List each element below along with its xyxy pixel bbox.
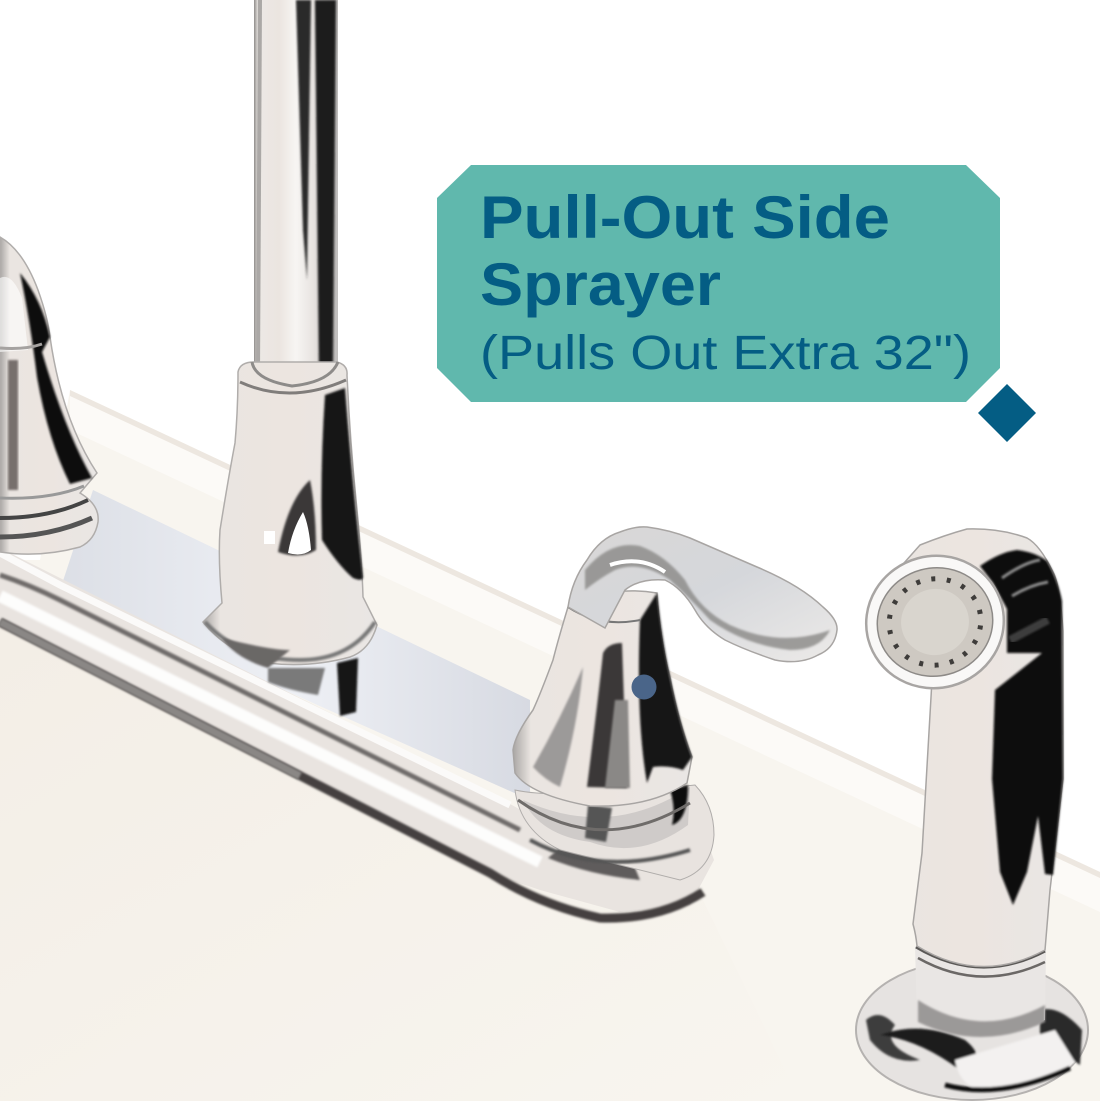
handle cone	[513, 591, 692, 806]
chrome mounting plate	[0, 490, 714, 918]
handle lever	[568, 527, 837, 662]
callout subtext: (Pulls Out Extra 32")	[480, 327, 971, 380]
icon: diamond marker	[978, 384, 1036, 442]
callout panel	[437, 165, 1000, 402]
callout heading second line: Sprayer	[480, 251, 721, 318]
sprayer dark reflection	[980, 550, 1063, 905]
center faucet spout	[203, 0, 377, 716]
icon: handle indicator button	[632, 674, 656, 700]
sprayer base reflections	[866, 1009, 1082, 1092]
sprayer face	[851, 540, 1019, 704]
sprayer collar	[915, 946, 1046, 1035]
callout heading: Pull-Out Side	[480, 184, 890, 251]
left faucet handle	[0, 237, 98, 554]
side sprayer	[851, 529, 1088, 1100]
spout collar	[203, 362, 377, 665]
right faucet handle	[513, 527, 837, 880]
sink rim and deck	[0, 390, 1100, 1101]
sprayer body	[880, 529, 1063, 967]
